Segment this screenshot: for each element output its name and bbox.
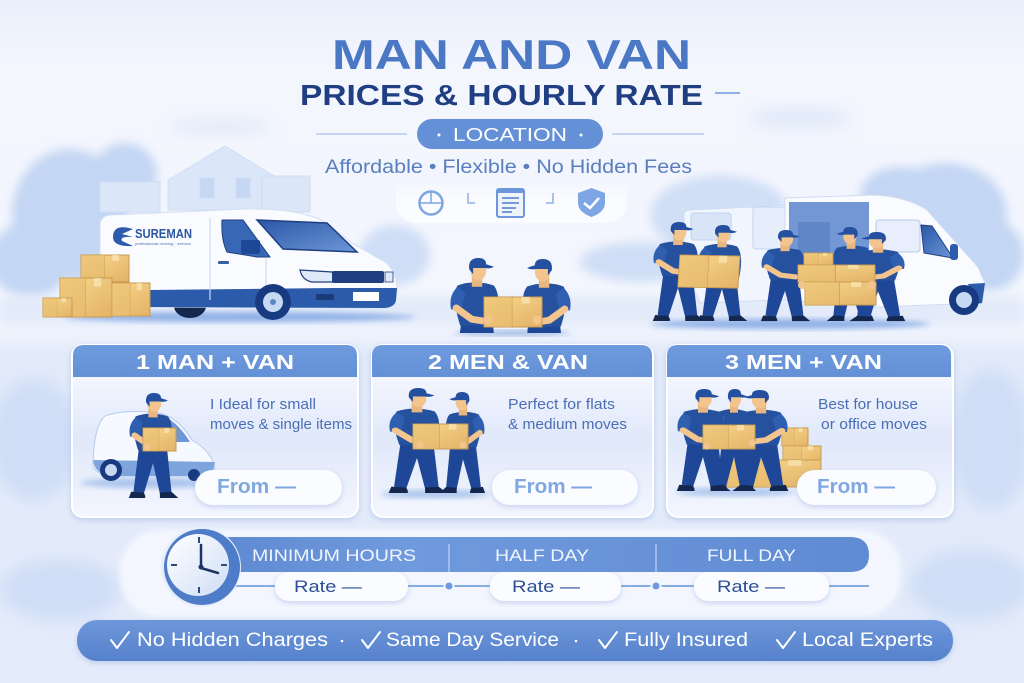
price pill <box>195 470 342 505</box>
tagline: Affordable • Flexible • No Hidden Fees <box>325 157 692 178</box>
description: or office moves <box>821 417 927 433</box>
benefits bar: Local Experts <box>802 630 933 651</box>
benefits bar: Fully Insured <box>624 630 748 651</box>
description <box>818 397 927 433</box>
icon: clock <box>420 192 442 214</box>
open van <box>684 195 985 315</box>
front wheel <box>255 284 291 320</box>
rates header bar: MINIMUM HOURS <box>252 547 416 565</box>
location pill <box>316 119 704 149</box>
card header <box>667 345 951 377</box>
price pill: From — <box>817 476 895 498</box>
card header: 3 MEN + VAN <box>725 352 882 374</box>
background scenery <box>0 108 1024 620</box>
rates header bar: HALF DAY <box>495 547 589 565</box>
panel: 2 men and van <box>372 345 653 517</box>
description: Perfect for flats <box>508 397 615 413</box>
rate pills: Rate — <box>717 577 785 596</box>
rear wheel <box>174 294 206 318</box>
movers loading the van <box>650 195 985 329</box>
rates header bar <box>200 537 869 572</box>
description <box>508 397 627 433</box>
panel: 3 men + van <box>667 345 953 517</box>
van logo <box>113 227 192 246</box>
card header <box>372 345 652 377</box>
description: & medium moves <box>508 417 627 433</box>
card header: 1 MAN + VAN <box>136 352 294 374</box>
price pill <box>797 470 936 505</box>
rates timeline <box>120 527 901 617</box>
illustration: three movers <box>675 389 821 496</box>
location pill: LOCATION <box>453 125 567 145</box>
stacked boxes <box>43 255 150 317</box>
benefits bar: No Hidden Charges <box>137 630 328 651</box>
icon panel <box>396 180 627 223</box>
price pill: From — <box>514 476 592 498</box>
benefits bar: Same Day Service <box>386 630 559 651</box>
rate pills <box>275 572 829 601</box>
rates header bar: FULL DAY <box>707 547 796 565</box>
subtitle: PRICES & HOURLY RATE <box>300 80 703 112</box>
description: moves & single items <box>210 417 352 433</box>
price pill <box>492 470 638 505</box>
icon: shield <box>578 188 605 217</box>
benefits bar <box>77 620 953 661</box>
title: MAN AND VAN <box>332 31 691 78</box>
card header: 2 MEN & VAN <box>428 352 588 374</box>
illustration: two movers <box>380 388 490 498</box>
illustration: van and mover <box>80 393 220 498</box>
icon: checklist <box>497 189 524 217</box>
rate pills: Rate — <box>512 577 580 596</box>
van logo: SUREMAN <box>135 227 192 241</box>
two movers carrying a box <box>450 258 571 337</box>
description: I Ideal for small <box>210 397 316 413</box>
card header <box>73 345 357 377</box>
panel: 1 man + van <box>72 345 358 517</box>
description <box>210 397 352 433</box>
van logo: professional moving · service <box>135 241 192 246</box>
description: Best for house <box>818 397 918 413</box>
price pill: From — <box>217 476 296 498</box>
rate pills: Rate — <box>294 577 362 596</box>
icon: clock <box>161 527 241 607</box>
hero van with boxes <box>43 209 415 322</box>
